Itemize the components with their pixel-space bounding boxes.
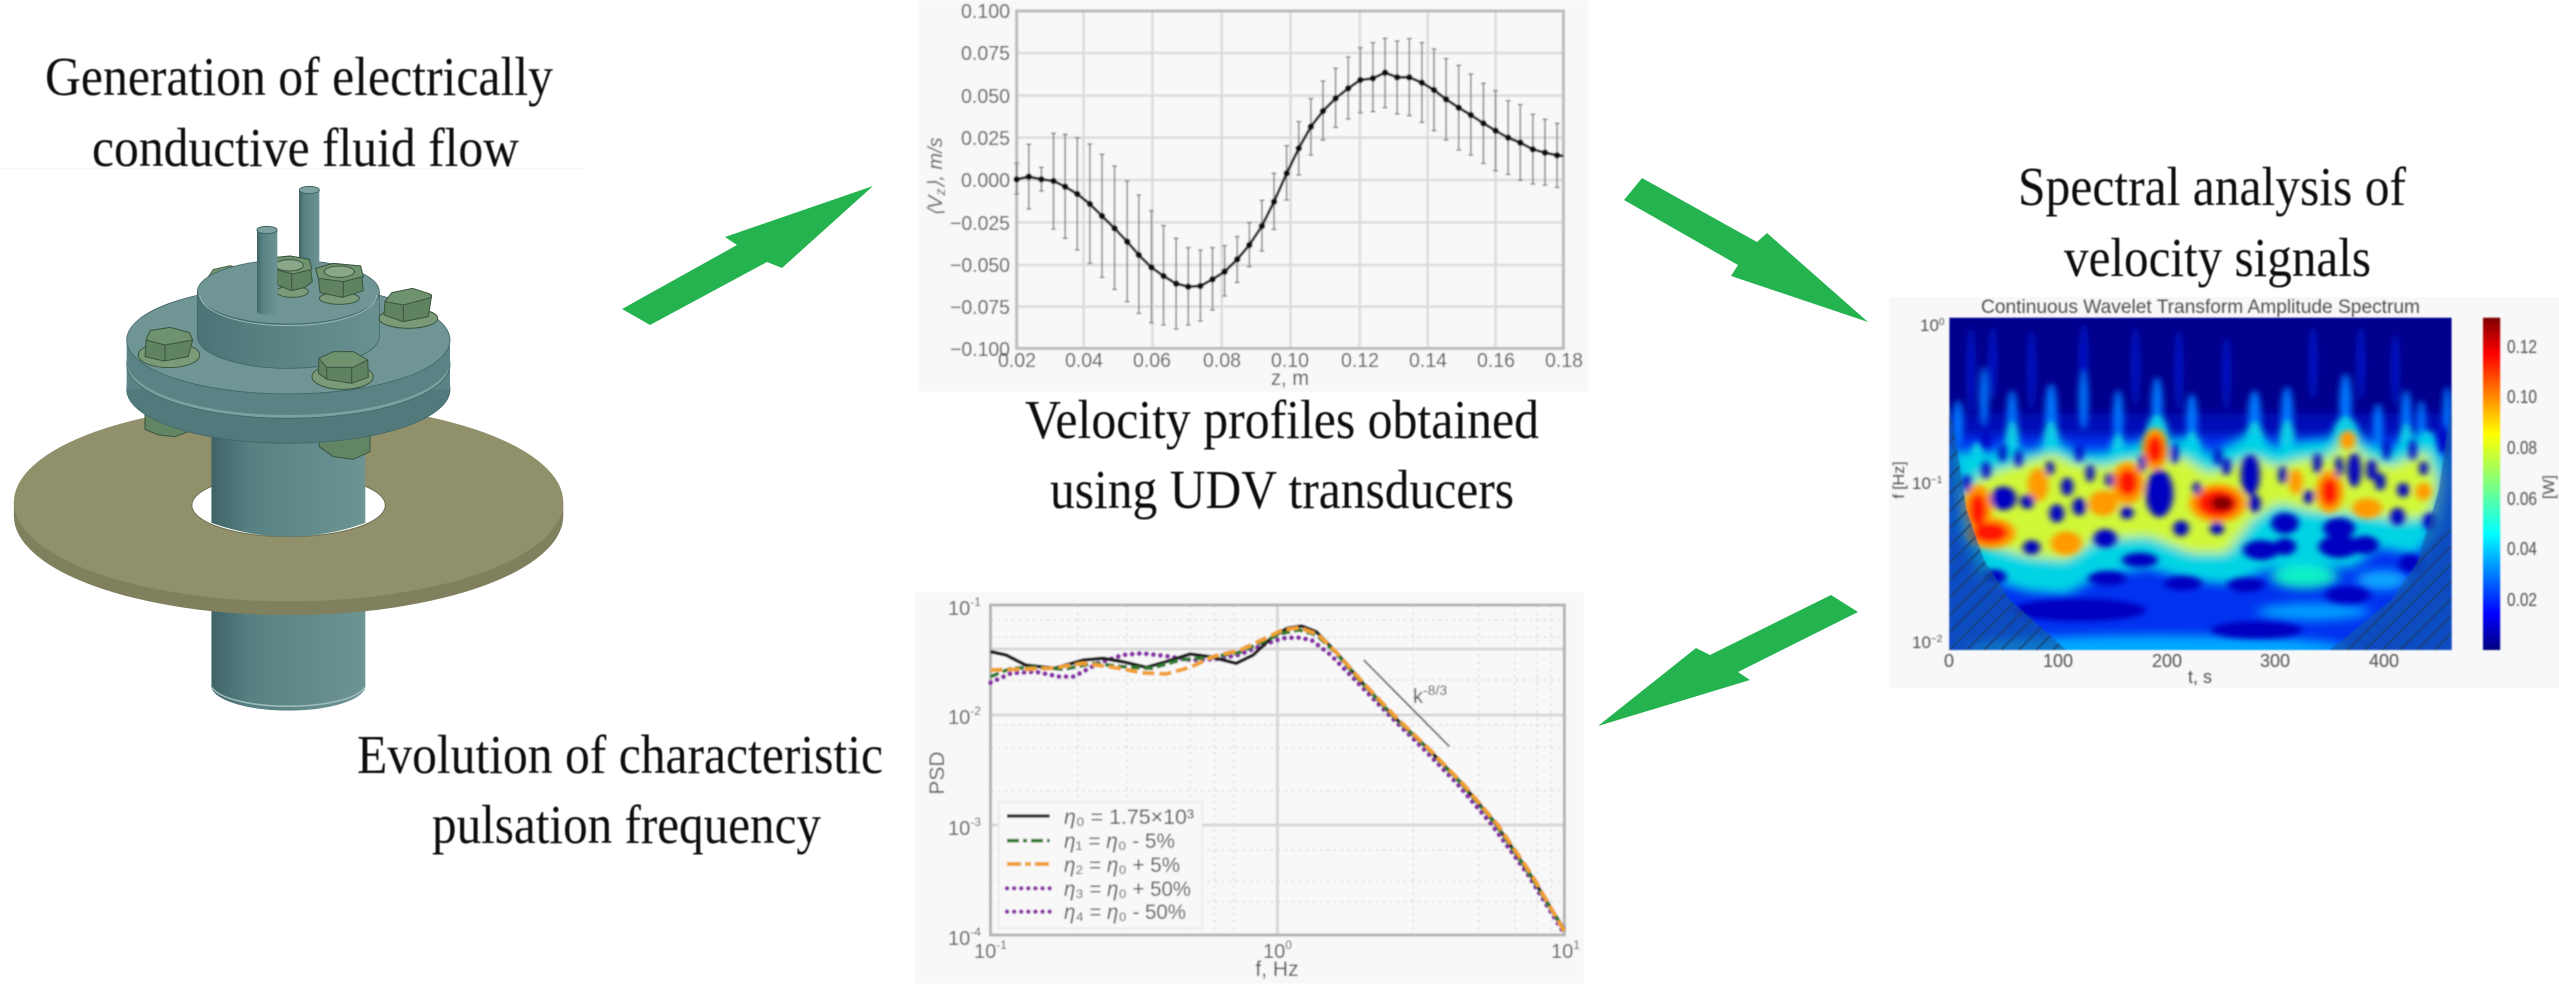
colorbar tick labels: 0.06 xyxy=(2507,489,2537,509)
chart title: Continuous Wavelet Transform Amplitude Spectrum xyxy=(1981,297,2420,318)
x axis tick labels: 10 xyxy=(1551,941,1573,963)
mean velocity curve xyxy=(1017,73,1563,287)
flange lower disc xyxy=(127,307,450,443)
legend labels: η₂ = η₀ + 5% xyxy=(1064,854,1180,877)
y axis tick labels: -3 xyxy=(970,815,981,829)
x axis tick labels: 10 xyxy=(974,941,996,963)
legend box xyxy=(999,802,1202,928)
chart background xyxy=(919,0,1588,392)
chart background xyxy=(915,592,1584,984)
heatmap xyxy=(1948,316,2453,652)
chart: velocity profile with error bars xyxy=(919,0,1588,392)
flange bolt front xyxy=(312,352,373,389)
y axis tick labels: −0.100 xyxy=(950,339,1010,361)
y axis tick labels: 10 xyxy=(948,818,970,840)
caption: velocity profiles: using UDV transducers xyxy=(1050,459,1514,520)
y axis tick labels: −0.075 xyxy=(950,297,1010,319)
x axis tick labels: 0.14 xyxy=(1409,350,1447,372)
front pipe xyxy=(257,226,277,315)
heading: spectral analysis xyxy=(2018,156,2407,288)
x axis title: f, Hz xyxy=(1255,958,1299,981)
colorbar unit label: [W] xyxy=(2541,475,2558,499)
blue holes xyxy=(1962,426,2447,639)
caption: velocity profiles: Velocity profiles obtained xyxy=(1025,389,1539,450)
y axis tick labels: -1 xyxy=(970,595,981,609)
cone of influence hatching xyxy=(1948,405,2452,651)
y axis title: f [Hz] xyxy=(1891,461,1908,499)
lower cylinder xyxy=(211,603,365,711)
flange bolt left xyxy=(138,327,200,368)
flange top face xyxy=(127,286,450,394)
y axis tick labels: 0.100 xyxy=(961,1,1010,23)
x axis title: z, m xyxy=(1271,367,1309,390)
slope label: -8/3 xyxy=(1423,682,1447,698)
heading: generation of conductive flow: Generation of electrically xyxy=(45,46,553,107)
colorbar tick labels xyxy=(2507,337,2537,610)
y axis tick labels: 0.000 xyxy=(961,170,1010,192)
y axis tick labels: 0.075 xyxy=(961,43,1010,65)
y axis tick labels: 10 xyxy=(948,707,970,729)
y axis tick labels: -2 xyxy=(970,704,981,718)
arrow: spectral analysis to PSD xyxy=(1598,595,1858,726)
mid band xyxy=(1954,423,2447,593)
y axis tick labels: −0.025 xyxy=(950,213,1010,235)
y axis tick labels: −2 xyxy=(1931,634,1943,645)
baseline eta0 curve xyxy=(991,626,1564,930)
caption: characteristic frequency: Evolution of characteristic xyxy=(357,724,883,785)
x axis tick labels: -1 xyxy=(996,938,1007,952)
rear pipe xyxy=(299,186,319,268)
y axis tick labels: 10 xyxy=(948,598,970,620)
y axis tick labels: 0 xyxy=(1939,317,1945,328)
legend labels: η₃ = η₀ + 50% xyxy=(1064,878,1191,901)
yellow-green band xyxy=(1967,437,2439,560)
eta2 curve xyxy=(991,628,1564,931)
underside bolts xyxy=(145,410,370,459)
y axis tick labels: 10 xyxy=(1920,316,1939,335)
boss cylinder xyxy=(197,260,379,368)
x axis tick labels xyxy=(998,350,1583,372)
error bars xyxy=(1014,38,1560,329)
x axis tick labels: 200 xyxy=(2152,651,2182,671)
heading: spectral analysis: velocity signals xyxy=(2064,227,2371,288)
x axis tick labels xyxy=(974,938,1580,963)
x axis tick labels: 0.04 xyxy=(1065,350,1103,372)
olive mounting disk xyxy=(14,403,563,615)
x axis tick labels: 100 xyxy=(2043,651,2073,671)
heading: generation of conductive flow xyxy=(45,46,553,178)
flange bolt right xyxy=(379,288,438,328)
illustration: MHD apparatus with flange, bolts and disk xyxy=(0,168,586,711)
x axis tick labels: 0 xyxy=(1944,651,1954,671)
colorbar tick labels: 0.12 xyxy=(2507,337,2537,357)
y axis tick labels xyxy=(1912,316,1945,652)
caption: velocity profiles xyxy=(1025,389,1539,520)
x axis tick labels xyxy=(1944,651,2399,671)
caption: characteristic frequency xyxy=(357,724,883,855)
legend labels: η₀ = 1.75×10³ xyxy=(1064,806,1194,829)
x axis tick labels: 0.10 xyxy=(1271,350,1309,372)
top bolt right xyxy=(316,263,363,304)
legend line samples xyxy=(1007,816,1050,912)
flange assembly with bolts and pipes xyxy=(127,186,450,459)
top bolt left xyxy=(275,256,312,297)
eta1 curve xyxy=(991,630,1564,931)
x axis tick labels: 0.08 xyxy=(1203,350,1241,372)
y axis tick labels: 0.025 xyxy=(961,128,1010,150)
y axis title: PSD xyxy=(926,751,949,795)
low-frequency patches xyxy=(2271,565,2338,589)
eta3 and eta4 curve xyxy=(991,637,1562,931)
y axis title: ⟩, m/s xyxy=(925,137,947,188)
y axis tick labels: 10 xyxy=(948,928,970,950)
caption: characteristic frequency: pulsation frequency xyxy=(432,794,821,855)
colorbar tick labels: 0.02 xyxy=(2507,590,2537,610)
colorbar tick labels: 0.08 xyxy=(2507,438,2537,458)
y axis tick labels: 10 xyxy=(1912,633,1931,652)
legend labels: η₁ = η₀ - 5% xyxy=(1064,830,1175,853)
colorbar tick labels: 0.10 xyxy=(2507,387,2537,407)
y axis tick labels: −0.050 xyxy=(950,255,1010,277)
x axis tick labels: 0.16 xyxy=(1477,350,1515,372)
rear small bolt xyxy=(208,266,234,277)
chart: power spectral density xyxy=(915,592,1584,984)
y axis title: ⟨V xyxy=(925,195,947,217)
slope label: k xyxy=(1413,686,1423,708)
arrow: apparatus to velocity profile xyxy=(622,186,873,325)
x axis tick labels: 0.02 xyxy=(998,350,1036,372)
hotspots and holes xyxy=(1962,426,2447,639)
x axis tick labels: 0.06 xyxy=(1133,350,1171,372)
legend labels: η₄ = η₀ - 50% xyxy=(1064,901,1186,924)
chart: wavelet amplitude spectrum xyxy=(1891,298,2559,687)
x axis tick labels: 0.18 xyxy=(1545,350,1583,372)
chart background xyxy=(1889,297,2559,688)
legend labels xyxy=(1064,806,1194,924)
y axis tick labels xyxy=(950,1,1010,361)
x axis tick labels: 300 xyxy=(2260,651,2290,671)
x axis tick labels: 0 xyxy=(1285,938,1292,952)
y axis title: z xyxy=(932,188,948,196)
data points xyxy=(1017,73,1557,287)
vertical streaks xyxy=(1953,323,2452,478)
x axis tick labels: 0.12 xyxy=(1341,350,1379,372)
y axis tick labels: −1 xyxy=(1931,475,1943,486)
y axis tick labels: 0.050 xyxy=(961,86,1010,108)
heading: generation of conductive flow: conductive fluid flow xyxy=(92,117,519,178)
y axis tick labels xyxy=(948,595,981,950)
colorbar xyxy=(2483,318,2500,650)
slope guide line xyxy=(1364,660,1450,747)
upper cylinder through the hole xyxy=(211,427,365,537)
x axis title: t, s xyxy=(2188,667,2212,687)
x axis tick labels: 1 xyxy=(1573,938,1580,952)
x axis tick labels: 400 xyxy=(2369,651,2399,671)
colorbar tick labels: 0.04 xyxy=(2507,539,2537,559)
y axis tick labels: -4 xyxy=(970,925,981,939)
heading: spectral analysis: Spectral analysis of xyxy=(2018,156,2407,217)
y axis tick labels: 10 xyxy=(1912,474,1931,493)
x axis tick labels: 10 xyxy=(1263,941,1285,963)
arrow: velocity profile to spectral analysis xyxy=(1624,178,1868,322)
